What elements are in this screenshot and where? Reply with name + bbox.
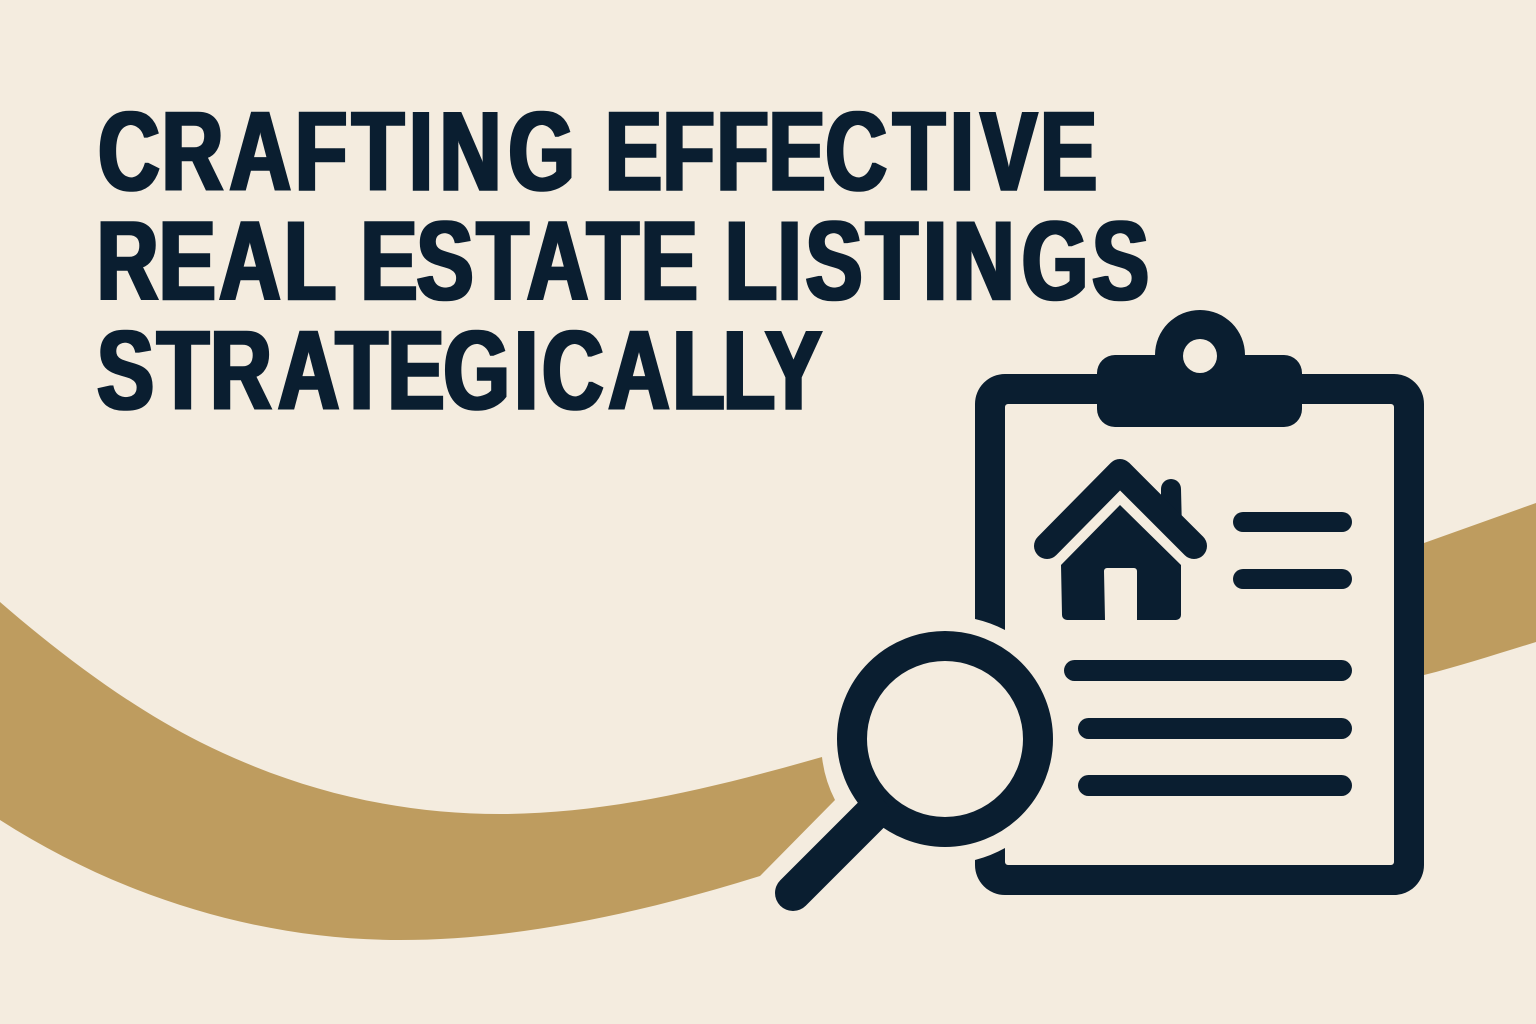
title: CRAFTING EFFECTIVE: [98, 90, 1097, 215]
icon: clipboard listing: [975, 310, 1424, 895]
clipboard frame: [975, 374, 1424, 895]
listing text lines beside house: [1233, 512, 1352, 589]
icon: house: [1047, 472, 1194, 620]
gold ribbon: right segment: [1424, 503, 1536, 675]
title: STRATEGICALLY: [97, 309, 822, 434]
icon: magnifying glass: [793, 646, 1038, 893]
clipboard clip: [1097, 310, 1302, 427]
gold ribbon: left swoosh: [0, 602, 835, 940]
listing text lines below house: [1064, 660, 1352, 796]
title: REAL ESTATE LISTINGS: [97, 199, 1149, 324]
title: [97, 90, 1149, 434]
